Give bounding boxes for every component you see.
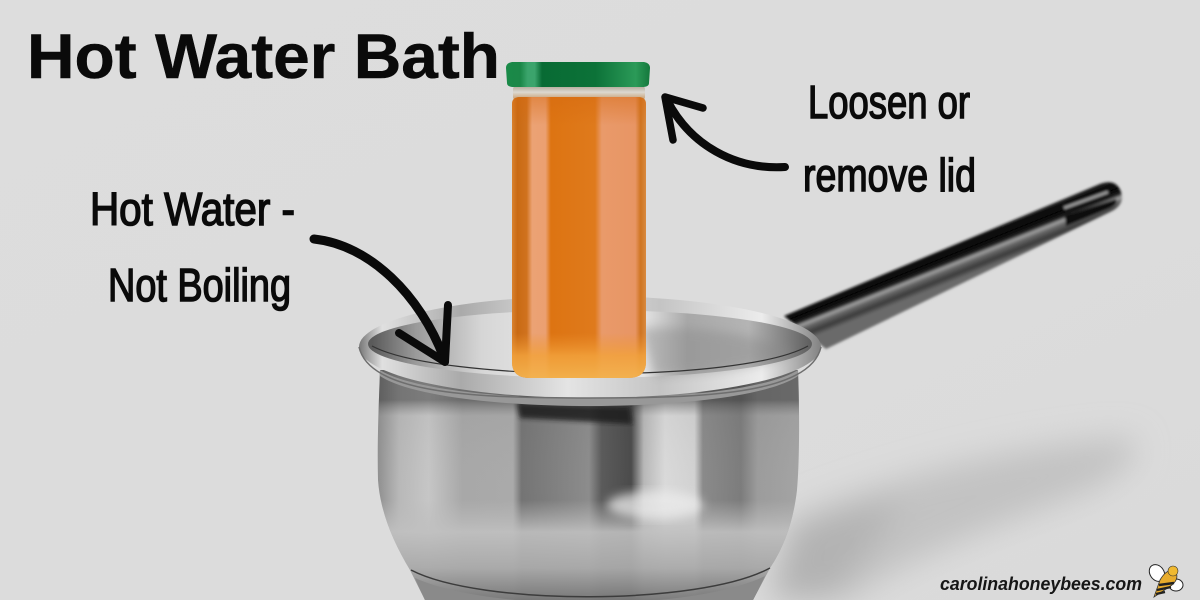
arrow: to jar lid [665,97,785,167]
jar jam body [512,97,646,378]
foot [415,576,765,600]
cast shadow of pot and handle [770,438,1136,600]
icon: bee logo [1146,562,1183,597]
label: loosen or remove lid: Loosen or [808,76,970,128]
label: hot water not boiling: Not Boiling [108,259,291,311]
pot underside band [380,370,798,406]
label: loosen or remove lid [803,76,976,201]
website credit: carolinahoneybees.com [940,573,1142,594]
pot interior [368,310,812,378]
jar glass neck [513,86,645,100]
label: hot water not boiling [90,183,295,311]
arrow: to hot water [314,239,448,362]
dark reflection under rim [517,403,632,424]
label: loosen or remove lid: remove lid [803,149,976,201]
bright body reflection [607,491,703,519]
icon: saucepan [359,296,821,600]
icon: jam jar [506,62,650,378]
pot body [378,370,799,600]
title: Hot Water Bath [27,22,500,92]
jar lid [506,62,650,87]
label: hot water not boiling: Hot Water - [90,183,295,235]
pot rim [359,296,821,398]
icon: saucepan handle [784,182,1122,349]
